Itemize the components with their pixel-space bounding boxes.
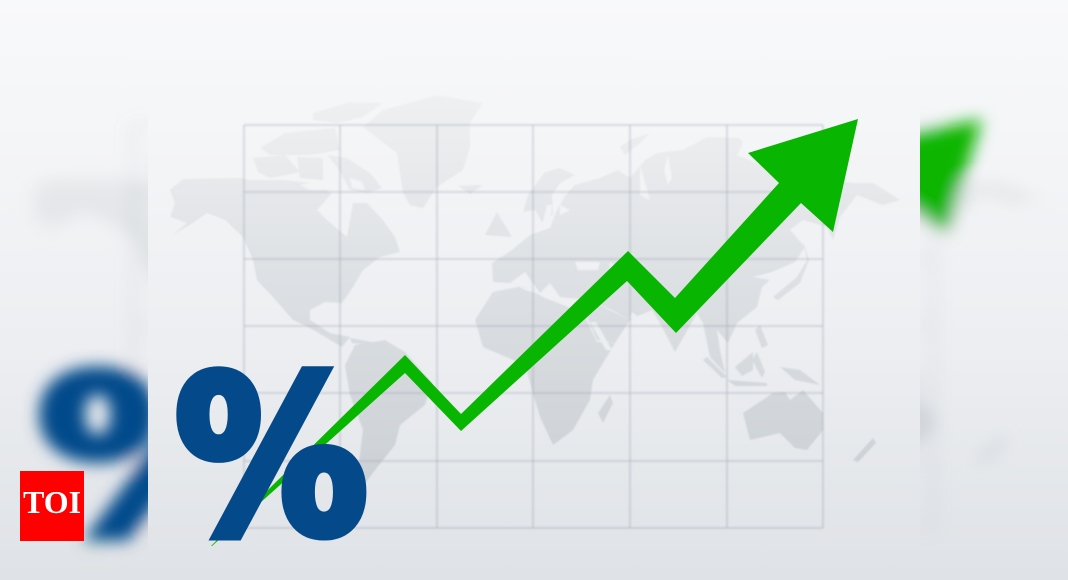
central image panel <box>148 113 920 554</box>
world map, grid, green rising arrow and percent sign <box>170 118 898 546</box>
blurred stretched backdrop of the artwork <box>30 95 1040 580</box>
TOI logo <box>20 471 84 541</box>
panel background <box>148 113 920 554</box>
TOI logo: TOI <box>23 484 81 520</box>
